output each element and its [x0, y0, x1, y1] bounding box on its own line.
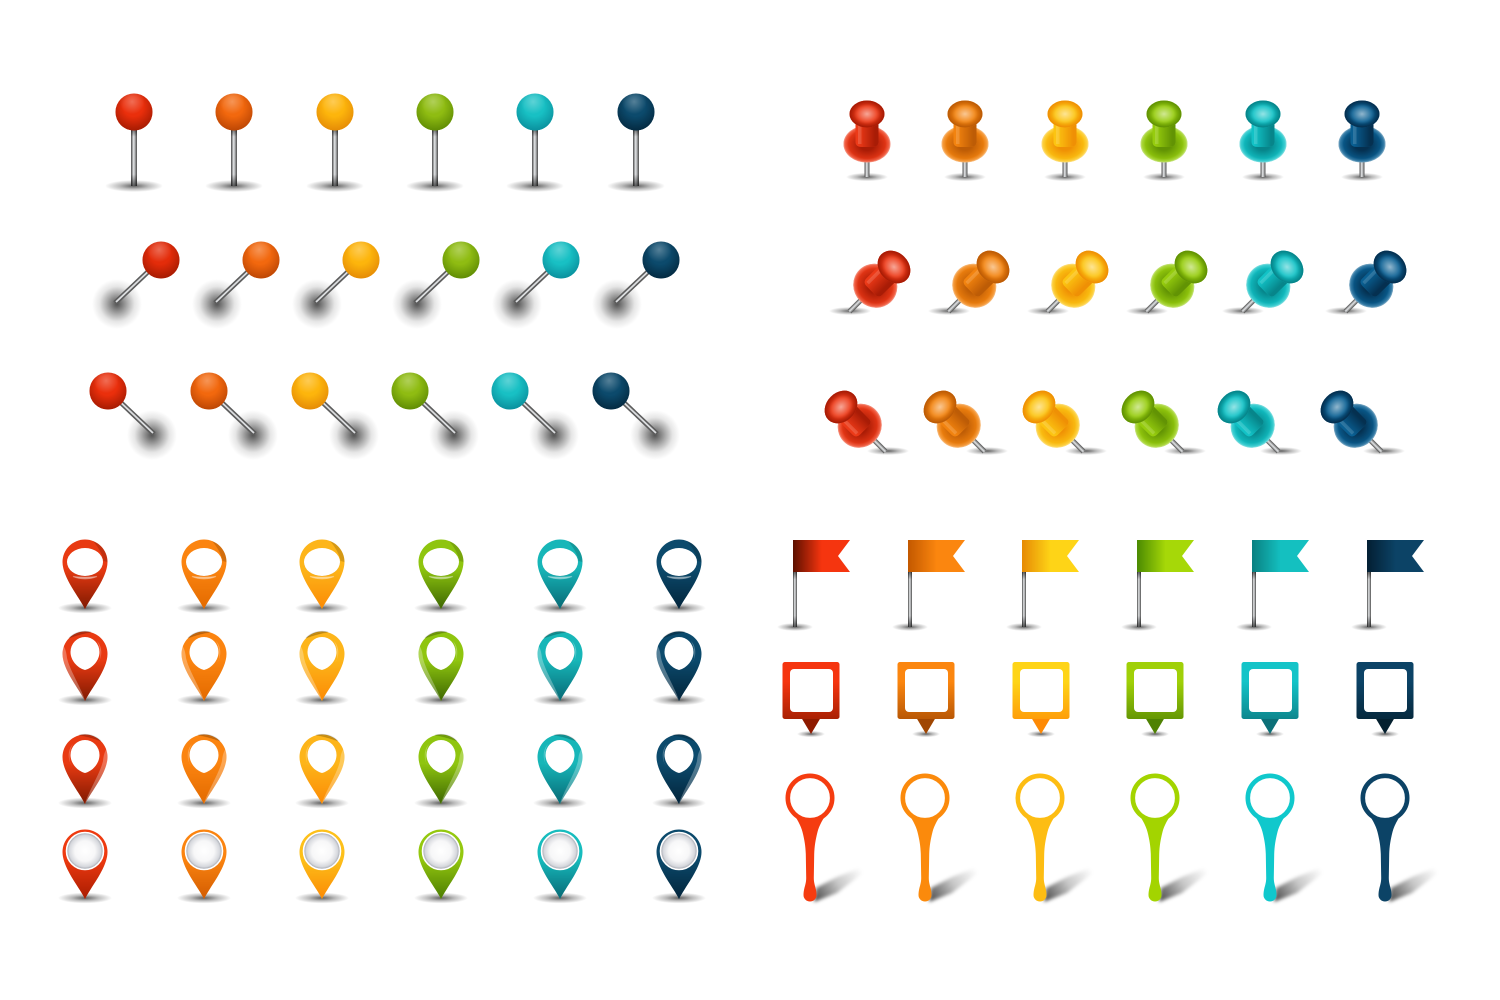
icon: yellow teardrop marker: [295, 631, 349, 705]
icon: red leaning ball pin: [90, 372, 177, 460]
icon: orange flag: [892, 540, 965, 631]
icon: green flag: [1121, 540, 1194, 631]
icon: green disc marker: [414, 830, 468, 903]
icon: green push pin: [1140, 100, 1188, 181]
icon: navy ring marker: [1363, 776, 1439, 902]
icon: teal square marker: [1242, 662, 1298, 737]
icon: orange ball pin: [205, 94, 263, 192]
row: ring markers: [788, 776, 1439, 902]
row: upright push pins: [844, 100, 1386, 181]
icon: navy square marker: [1356, 662, 1414, 737]
icon: red leaning push pin: [815, 381, 909, 467]
icon: teal disc marker: [533, 830, 587, 903]
icon: orange ring marker: [903, 776, 979, 902]
icon: yellow leaning push pin: [1013, 381, 1107, 467]
icon: red disc marker: [58, 830, 112, 903]
icon: green leaning ball pin: [392, 242, 480, 329]
icon: yellow leaning push pin: [1027, 241, 1118, 327]
icon: teal oval marker: [533, 540, 587, 613]
row: push pins leaning left: [815, 381, 1405, 467]
icon: red ball pin: [105, 94, 163, 192]
icon: teal leaning push pin: [1208, 381, 1302, 467]
row: ball pins leaning right: [92, 242, 680, 329]
icon: orange disc marker: [177, 830, 231, 903]
icon: red push pin: [844, 100, 890, 181]
icon: orange teardrop marker: [177, 734, 231, 808]
icon: navy leaning ball pin: [592, 242, 680, 329]
row: flags: [777, 540, 1424, 631]
icon: yellow square marker: [1012, 662, 1070, 737]
icon: orange square marker: [898, 662, 954, 737]
icon: green ring marker: [1133, 776, 1209, 902]
icon: teal ball pin: [506, 94, 564, 192]
icon: red oval marker: [58, 540, 112, 613]
icon: teal flag: [1236, 540, 1309, 631]
panel: ball-head map pins: [90, 94, 680, 460]
icon: teal push pin: [1240, 100, 1286, 181]
icon: orange teardrop marker: [177, 631, 231, 705]
icon: green leaning push pin: [1126, 241, 1217, 327]
icon: red teardrop marker: [58, 631, 112, 705]
icon: green leaning ball pin: [392, 372, 479, 460]
icon: yellow ring marker: [1018, 776, 1094, 902]
icon: green leaning push pin: [1112, 381, 1206, 467]
icon: navy oval marker: [652, 540, 706, 613]
icon: teal ring marker: [1248, 776, 1324, 902]
icon: teal leaning ball pin: [492, 372, 579, 460]
row: square markers: [782, 662, 1414, 737]
icon: red square marker: [782, 662, 840, 737]
icon: green teardrop marker: [414, 631, 468, 705]
icon: teal leaning ball pin: [492, 242, 580, 329]
icon: red leaning push pin: [829, 241, 920, 327]
icon: navy disc marker: [652, 830, 706, 903]
icon: red teardrop marker: [58, 734, 112, 808]
icon: navy teardrop marker: [652, 734, 706, 808]
row: markers with teardrop hole, left bevel: [58, 631, 706, 705]
icon: teal teardrop marker: [533, 734, 587, 808]
icon: navy leaning push pin: [1311, 381, 1405, 467]
icon: green oval marker: [414, 540, 468, 613]
icon: yellow leaning ball pin: [292, 242, 380, 329]
icon: orange leaning ball pin: [192, 242, 280, 329]
panel: location markers: [58, 540, 706, 903]
icon: orange leaning push pin: [928, 241, 1019, 327]
icon: teal teardrop marker: [533, 631, 587, 705]
icon: yellow disc marker: [295, 830, 349, 903]
icon: green ball pin: [406, 94, 464, 192]
icon: orange leaning push pin: [914, 381, 1008, 467]
icon: navy ball pin: [607, 94, 665, 192]
icon: red leaning ball pin: [92, 242, 180, 329]
row: markers with silver disc: [58, 830, 706, 903]
icon: yellow oval marker: [295, 540, 349, 613]
icon: red flag: [777, 540, 850, 631]
icon: navy leaning ball pin: [592, 372, 680, 460]
icon: yellow push pin: [1042, 100, 1088, 181]
icon: yellow teardrop marker: [295, 734, 349, 808]
icon: green square marker: [1126, 662, 1184, 737]
row: upright ball pins: [105, 94, 665, 192]
icon: yellow leaning ball pin: [292, 372, 379, 460]
icon: red ring marker: [788, 776, 864, 902]
icon: navy flag: [1351, 540, 1424, 631]
icon: orange push pin: [942, 100, 988, 181]
row: ball pins leaning left: [90, 372, 680, 460]
icon: orange oval marker: [177, 540, 231, 613]
row: markers with oval hole: [58, 540, 706, 613]
panel: flags, square markers and ring markers: [777, 540, 1439, 902]
icon: navy push pin: [1338, 100, 1386, 181]
icon: green teardrop marker: [414, 734, 468, 808]
panel: push pins: [815, 100, 1416, 467]
icon: orange leaning ball pin: [190, 372, 278, 460]
icon: navy teardrop marker: [652, 631, 706, 705]
icon: yellow ball pin: [306, 94, 364, 192]
icon: yellow flag: [1006, 540, 1079, 631]
icon: navy leaning push pin: [1325, 241, 1416, 327]
row: push pins leaning right: [829, 241, 1416, 327]
icon: teal leaning push pin: [1222, 241, 1313, 327]
row: markers with teardrop hole, right bevel: [58, 734, 706, 808]
